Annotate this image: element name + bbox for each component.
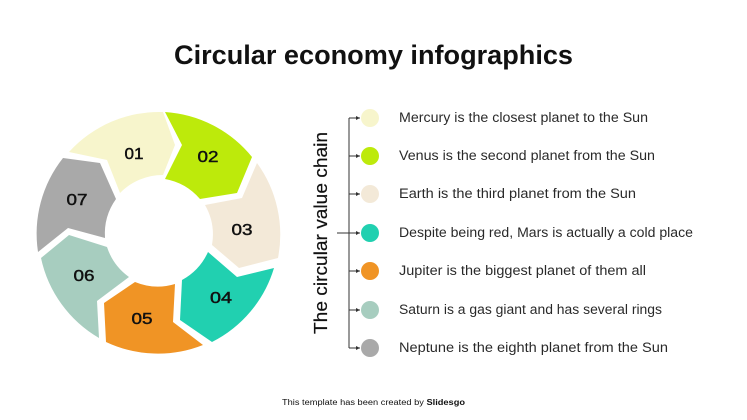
segment 01: [69, 112, 175, 193]
list item: Earth: [361, 185, 636, 203]
list item: Neptune: [361, 339, 668, 357]
vertical label: The circular value chain: [310, 132, 331, 334]
list item: Jupiter: Jupiter is the biggest planet of them all: [399, 263, 646, 278]
list item: Venus: Venus is the second planet from the Sun: [399, 148, 655, 163]
segment 03: 03: [232, 222, 253, 239]
list item: Jupiter: [361, 262, 646, 280]
footer credit: This template has been created by Slidesgo: [282, 398, 465, 407]
segment 06: 06: [74, 268, 95, 285]
segment 05: [104, 282, 203, 354]
segment 07: [37, 158, 116, 252]
segment 02: 02: [198, 149, 219, 166]
list item: Neptune: Neptune is the eighth planet from the Sun: [399, 340, 668, 355]
bracket connector: [337, 118, 360, 348]
segment 07: 07: [66, 192, 88, 209]
segment 06: [41, 235, 129, 338]
segment 04: 04: [210, 290, 232, 307]
segment 04: [180, 252, 274, 342]
list item: Mercury: [361, 109, 648, 127]
list item: Saturn: Saturn is a gas giant and has several rings: [399, 302, 662, 317]
list item: Mars: Despite being red, Mars is actually a cold place: [399, 225, 693, 240]
segment 02: [165, 112, 252, 199]
title: Circular economy infographics: [174, 40, 573, 70]
segment 05: 05: [132, 311, 153, 328]
list item: Mercury: Mercury is the closest planet to the Sun: [399, 110, 648, 125]
segment 01: 01: [124, 146, 144, 163]
list item: Earth: Earth is the third planet from the Sun: [399, 186, 636, 201]
circular diagram: [37, 112, 280, 354]
segment 03: [205, 163, 280, 268]
list item: Venus: [361, 147, 655, 165]
